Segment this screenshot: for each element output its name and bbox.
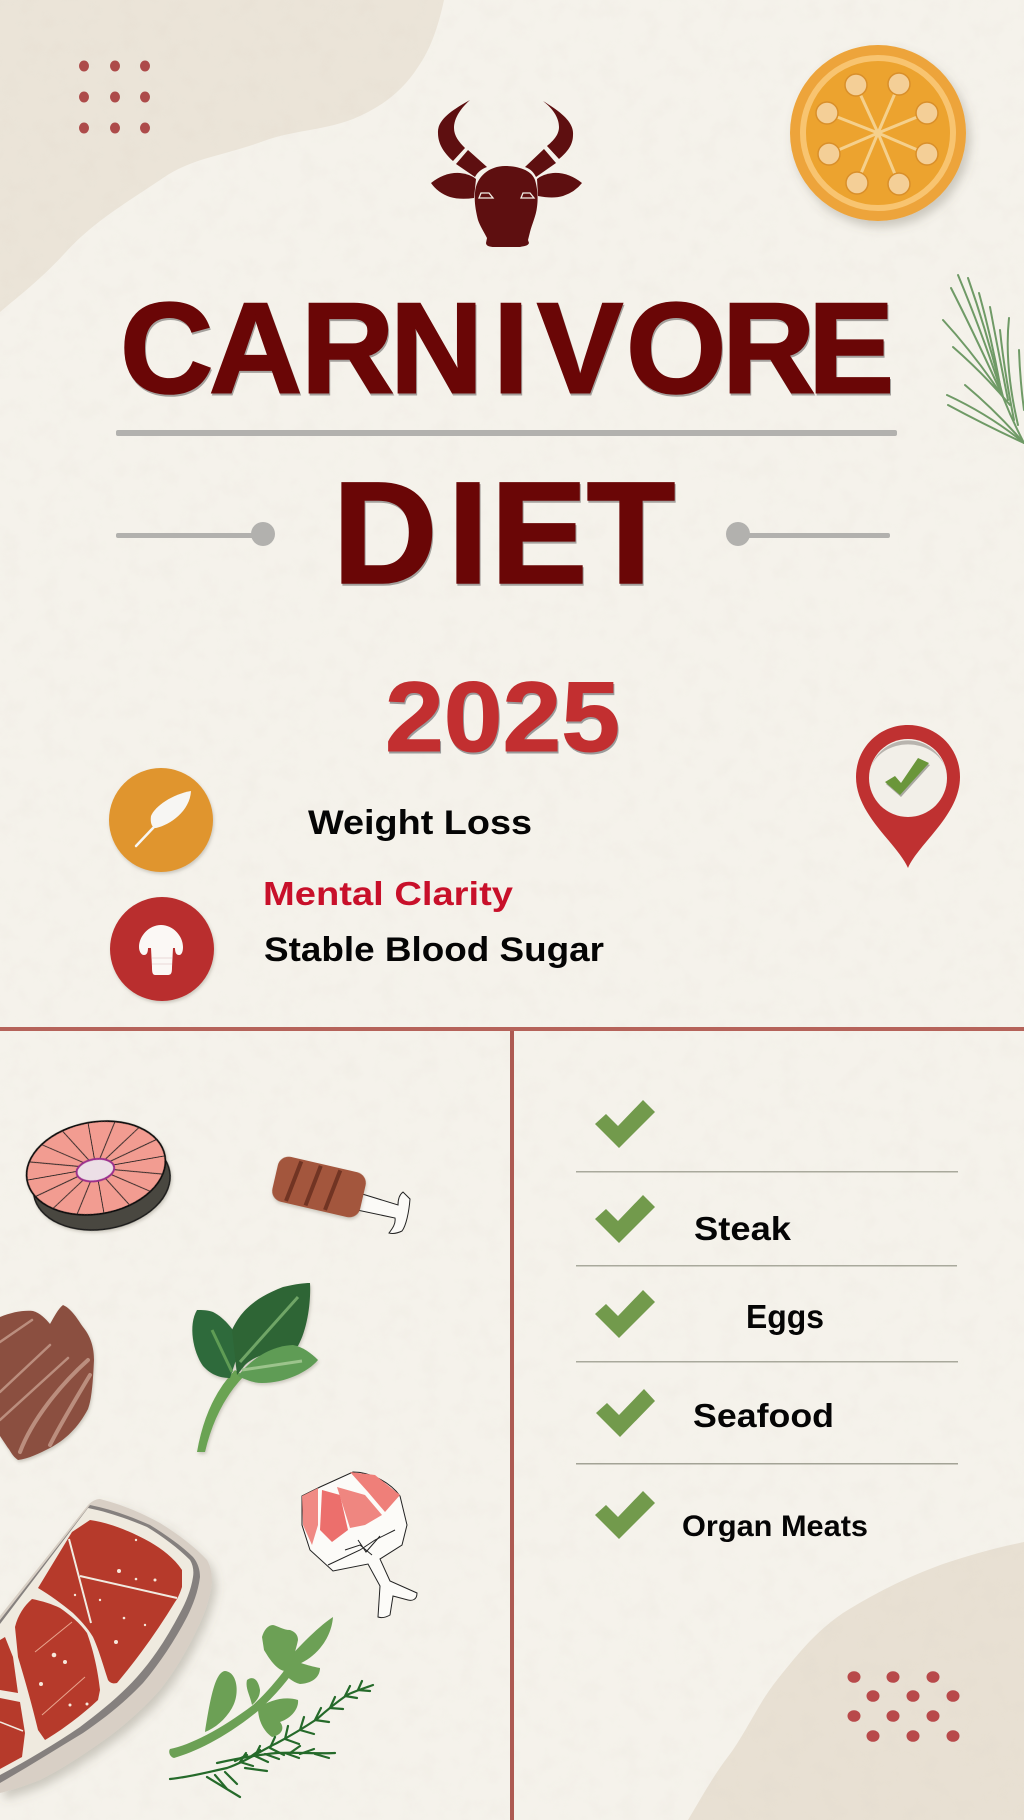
divider: horizontal — [0, 1027, 1024, 1031]
divider: vertical — [510, 1031, 514, 1820]
icon: orange slice — [790, 45, 966, 221]
food: rosemary sprig — [170, 1681, 373, 1797]
text: Steak: Steak — [694, 1210, 792, 1247]
text: Mental Clarity: Mental Clarity — [263, 875, 514, 912]
title: DIET: DIET — [333, 452, 675, 614]
icon: mushroom badge — [110, 897, 214, 1001]
food: brown liver slice — [0, 1305, 94, 1460]
text: Eggs: Eggs — [746, 1298, 824, 1335]
icon: location pin — [856, 725, 960, 868]
list: check 2 — [595, 1195, 655, 1243]
food: raw steak with bone outline — [302, 1472, 417, 1618]
food: grilled chop with bone — [270, 1154, 410, 1233]
list: check 1 — [595, 1100, 655, 1148]
list: check 5 — [595, 1491, 655, 1539]
food: arugula sprig — [169, 1617, 333, 1758]
list rule 3 — [576, 1361, 958, 1362]
blob: top-left beige — [0, 0, 444, 312]
text: Seafood: Seafood — [693, 1397, 834, 1434]
text: Weight Loss: Weight Loss — [308, 804, 532, 842]
list rule 4 — [576, 1463, 958, 1464]
list rule 1 — [576, 1171, 958, 1172]
title: CARNIVORE: CARNIVORE — [120, 276, 894, 420]
food: large marbled steak — [0, 1499, 212, 1793]
title rule — [116, 430, 897, 436]
dot grid: bottom-right — [848, 1671, 960, 1742]
text: Organ Meats: Organ Meats — [682, 1510, 868, 1543]
list rule 2 — [576, 1265, 957, 1266]
list: check 4 — [596, 1389, 655, 1437]
icon: pine sprig — [943, 275, 1024, 443]
dot grid: top-left — [79, 60, 150, 134]
year: 2025: 2025 — [385, 661, 620, 772]
ornament: right connector — [726, 522, 890, 546]
ornament: left connector — [116, 522, 275, 546]
text: Stable Blood Sugar: Stable Blood Sugar — [264, 931, 604, 969]
food: fish steak — [19, 1110, 178, 1241]
blob: bottom-right beige — [688, 1542, 1024, 1820]
icon: bull head — [431, 100, 582, 247]
list: check 3 — [595, 1290, 655, 1338]
food: green leaf sprig — [192, 1283, 318, 1452]
icon: leaf badge — [109, 768, 213, 872]
